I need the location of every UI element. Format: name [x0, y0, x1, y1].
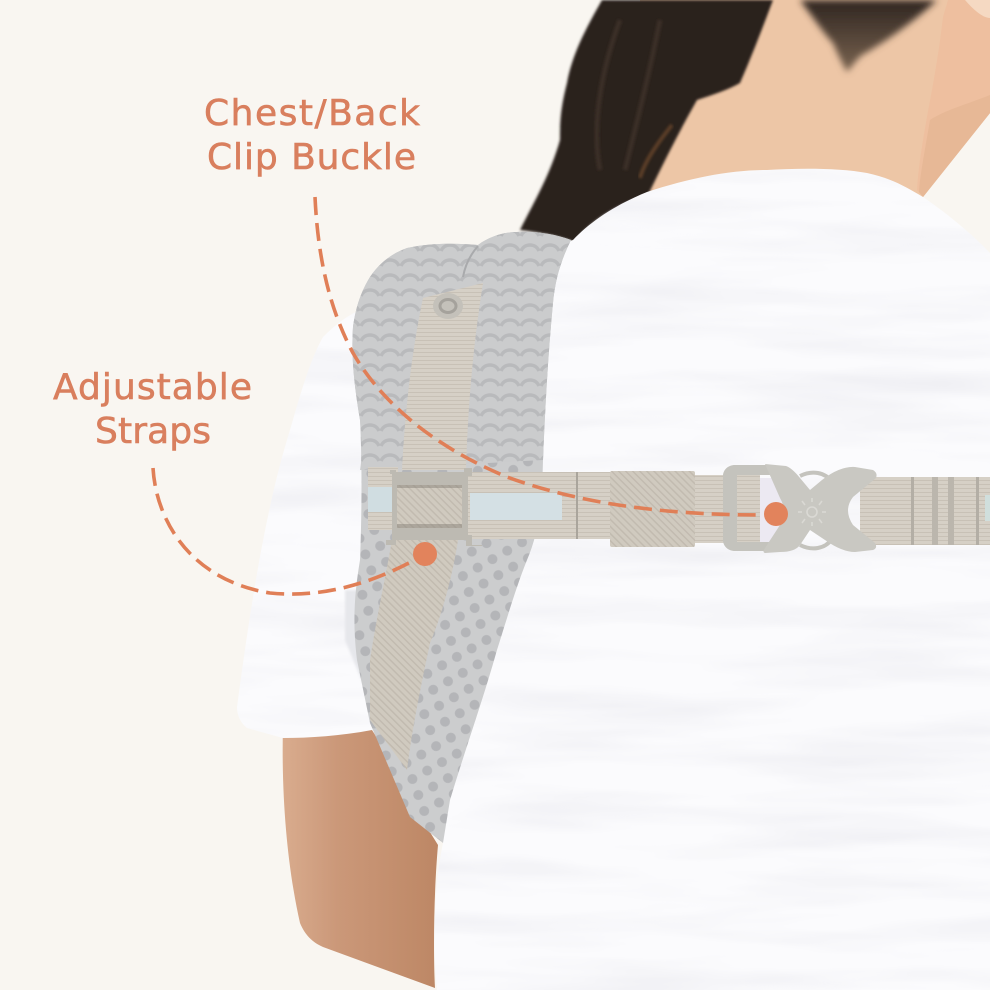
X-shaped clip: [764, 464, 877, 553]
upper padding arch texture: [352, 232, 571, 470]
callout: chest/back clip buckle heading: [204, 93, 420, 178]
chest clip buckle: [723, 464, 877, 553]
middle webbing section: [466, 472, 611, 539]
right strap section: [860, 477, 990, 545]
slider adjuster: [386, 468, 482, 546]
callout: adjustable straps heading: Straps: [95, 411, 211, 452]
leader line: chest/back clip buckle: [315, 197, 788, 526]
horizontal chest clip strap: [368, 467, 727, 547]
strap keeper: [610, 471, 695, 547]
neck: [640, 0, 990, 197]
stitching: [576, 472, 578, 539]
webbing to ring: [695, 475, 727, 543]
callout: adjustable straps heading: [53, 367, 252, 452]
callout: adjustable straps heading: Adjustable: [53, 367, 252, 408]
leader line: adjustable straps: [153, 468, 437, 594]
shoulder strap mesh padding: [352, 232, 571, 843]
left webbing section: [368, 467, 398, 530]
lower webbing strap: [370, 540, 458, 770]
ring strap bar: [737, 475, 760, 542]
hair ponytail: [520, 0, 937, 242]
strap snap button: [433, 293, 463, 319]
callout: chest/back clip buckle heading: Chest/Back: [204, 93, 420, 134]
buckle ring: [723, 465, 770, 551]
reflective insets: [368, 487, 562, 520]
arches above and below: [800, 473, 832, 548]
t-shirt: [230, 160, 990, 990]
padding seam: [463, 246, 478, 277]
buckle window: [760, 478, 810, 542]
upper webbing strap: [402, 283, 483, 470]
callout: chest/back clip buckle heading: Clip Buckle: [207, 137, 416, 178]
arm: [283, 725, 438, 988]
flower logo: [798, 498, 826, 526]
